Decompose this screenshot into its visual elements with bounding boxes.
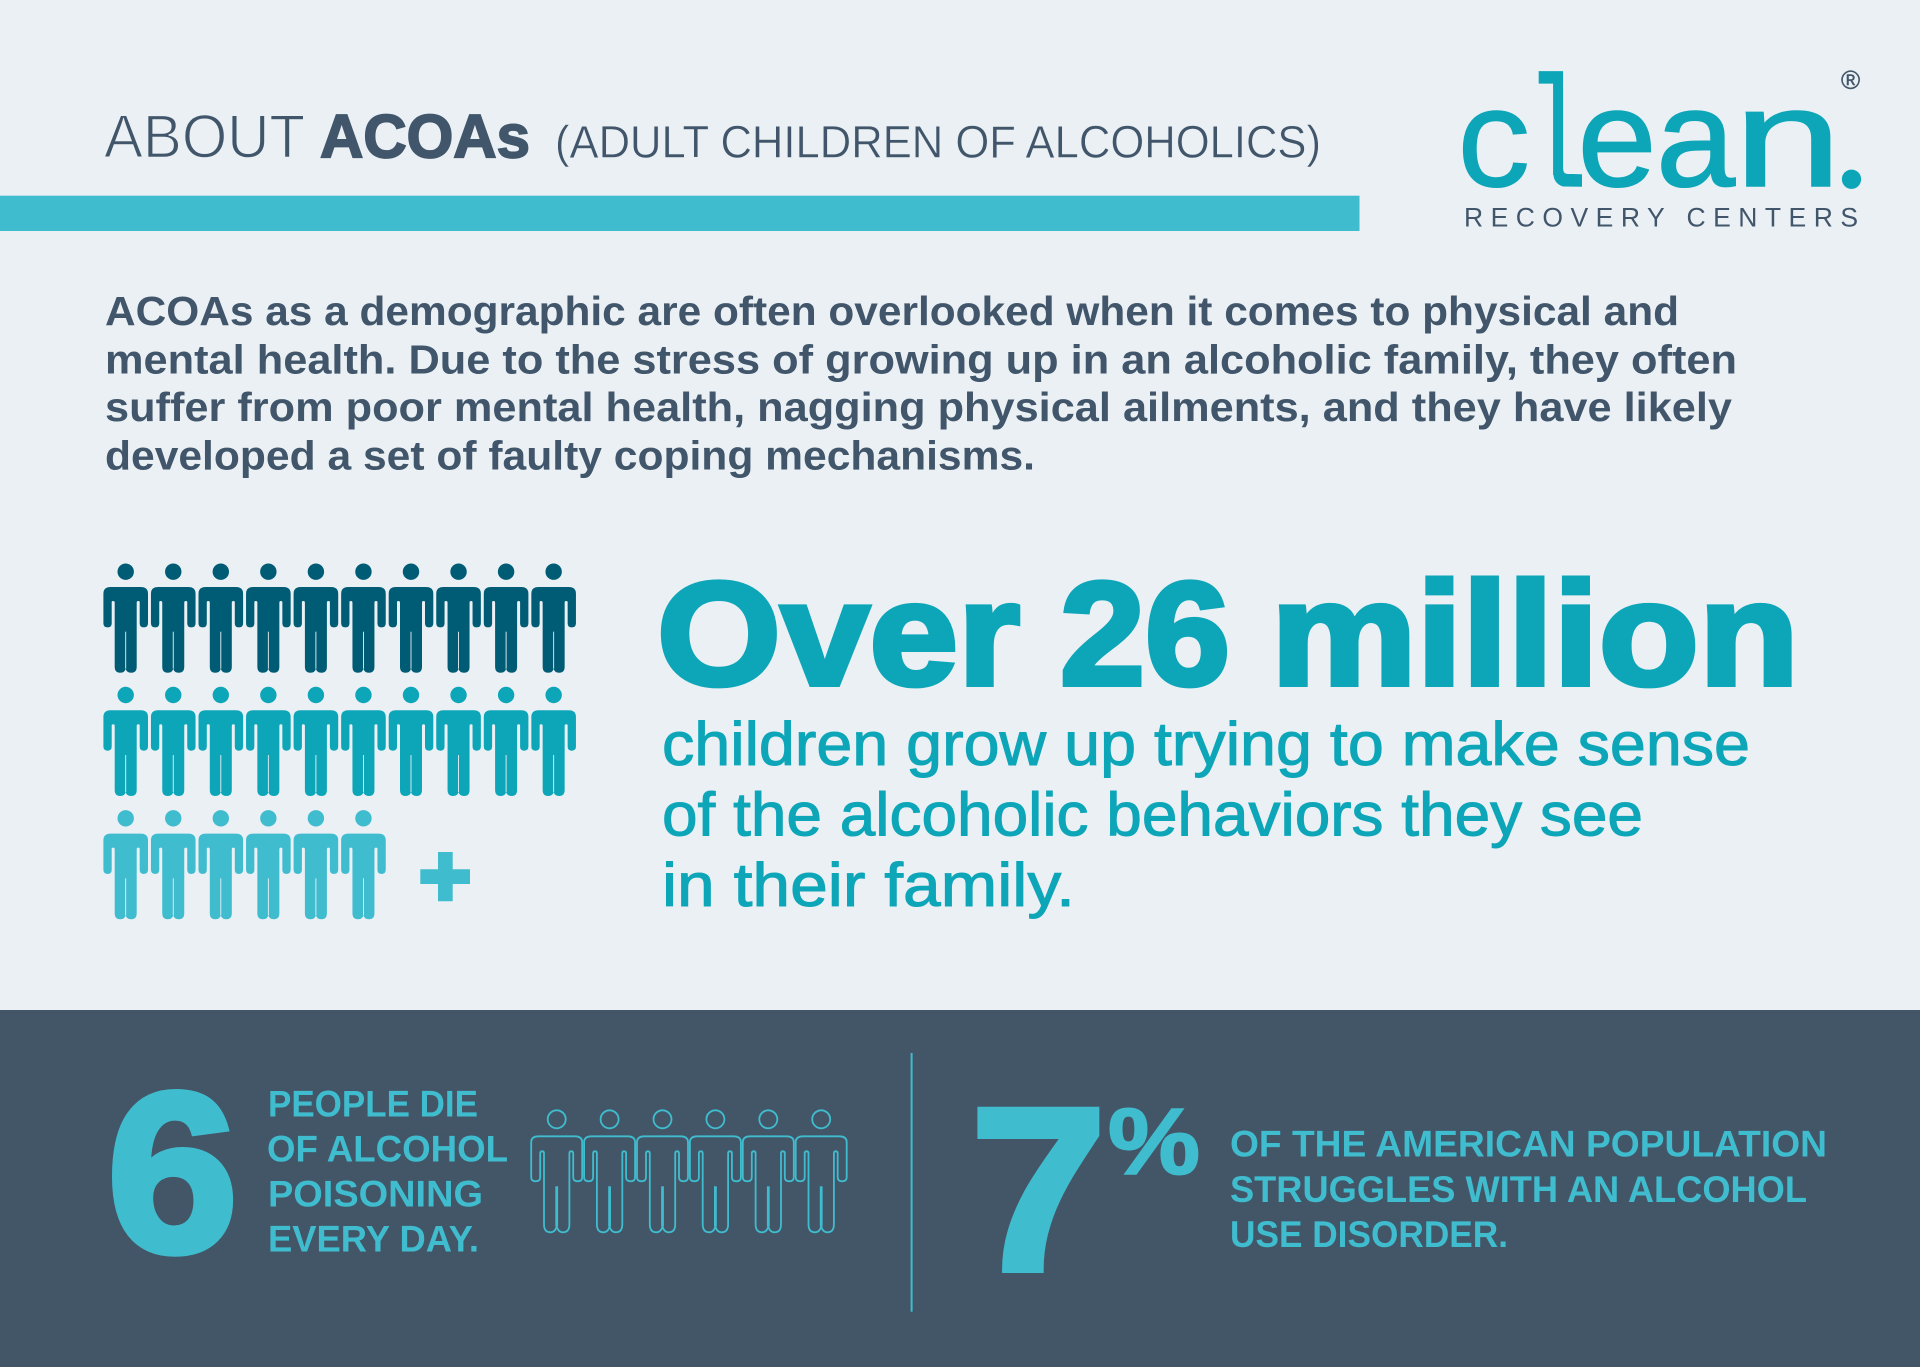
headline: over 26 million: 26	[1060, 552, 1230, 716]
stat text: american population: STRUGGLES WITH AN ALCOHOL	[1230, 1169, 1807, 1210]
headline: over 26 million: Over	[657, 552, 1020, 716]
row of ten teal people	[103, 687, 576, 796]
intro paragraph: ACOAs as a demographic are often overlooked when it comes to physical and	[105, 288, 1679, 334]
stat text: people die: PEOPLE DIE	[268, 1084, 478, 1125]
title: ACOAs	[320, 103, 530, 171]
logo: clean recovery centers: n	[1729, 70, 1847, 228]
headline subtext: children grow up trying to make sense	[662, 710, 1750, 778]
headline subtext: of the alcoholic behaviors they see	[662, 781, 1643, 849]
logo: clean recovery centers: l	[1526, 55, 1587, 233]
row of ten dark people	[103, 564, 576, 673]
intro paragraph	[105, 288, 1737, 478]
logo: clean recovery centers: RECOVERY CENTERS	[1464, 203, 1858, 233]
logo: clean recovery centers: .	[1833, 53, 1870, 219]
title bar	[0, 196, 1360, 231]
stat text: american population: OF THE AMERICAN POPULATION	[1230, 1124, 1827, 1165]
logo: clean recovery centers	[1455, 53, 1870, 233]
intro paragraph: developed a set of faulty coping mechanisms.	[105, 432, 1035, 478]
stat number: 7 percent: %	[1108, 1089, 1200, 1194]
title	[104, 103, 1321, 171]
pictogram: six outlined people	[531, 1110, 847, 1232]
icon: plus sign	[420, 852, 470, 901]
logo: clean recovery centers: ®	[1841, 65, 1860, 95]
intro paragraph: suffer from poor mental health, nagging physical ailments, and they have likely	[105, 384, 1732, 430]
stat text: people die: OF ALCOHOL	[267, 1129, 508, 1170]
panel: bottom statistics	[0, 1010, 1920, 1367]
logo: clean recovery centers: a	[1653, 70, 1740, 228]
stat number: 7 percent: 7	[970, 1060, 1107, 1320]
headline: over 26 million: million	[1271, 552, 1799, 716]
logo: clean recovery centers: c	[1455, 71, 1536, 229]
intro paragraph: mental health. Due to the stress of growing up in an alcoholic family, they often	[105, 336, 1737, 382]
stat number: 7 percent	[970, 1060, 1200, 1320]
stat number: 6: 6	[107, 1047, 238, 1300]
title: (ADULT CHILDREN OF ALCOHOLICS)	[555, 117, 1321, 168]
stat text: people die	[267, 1084, 508, 1260]
stat text: american population	[1230, 1124, 1827, 1255]
stat text: people die: POISONING	[268, 1174, 483, 1215]
logo: clean recovery centers: e	[1574, 71, 1660, 229]
headline: over 26 million	[657, 552, 1799, 716]
headline subtext	[662, 710, 1750, 919]
row of six light people	[103, 810, 386, 919]
stat text: people die: EVERY DAY.	[268, 1219, 479, 1260]
stat text: american population: USE DISORDER.	[1230, 1214, 1508, 1255]
pictogram: 26 people plus	[103, 564, 576, 919]
headline subtext: in their family.	[662, 851, 1075, 919]
title: ABOUT	[104, 103, 305, 171]
